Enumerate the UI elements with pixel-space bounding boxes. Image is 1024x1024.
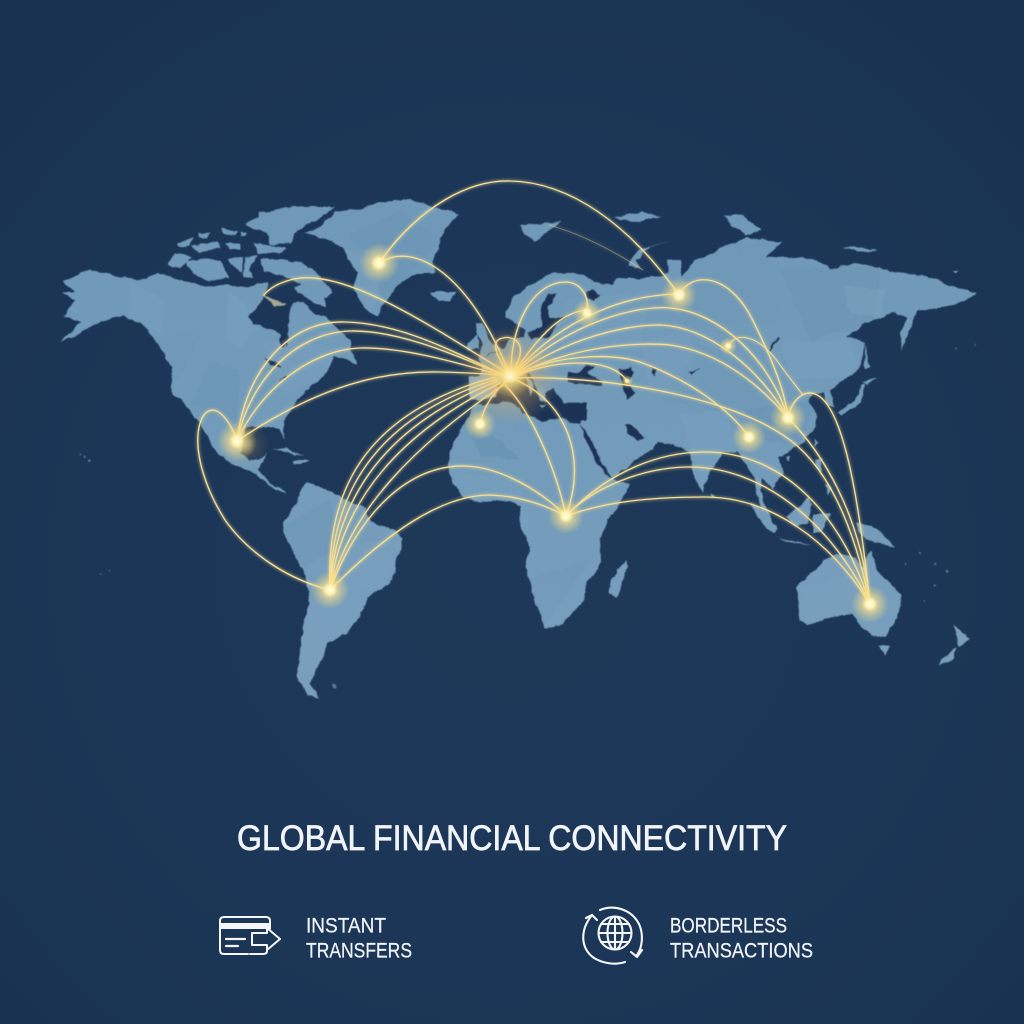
label: instant transfers: INSTANT <box>306 914 386 938</box>
node: Argentina <box>311 571 349 609</box>
glowing city nodes <box>217 243 889 623</box>
arcs: Argentina to Europe <box>330 377 503 590</box>
connection arcs <box>198 181 870 604</box>
feature: instant transfers <box>220 914 412 962</box>
arcs: Argentina to Africa <box>330 466 566 590</box>
arc: Greenland to Europe <box>379 256 510 375</box>
inland seas and water bodies <box>264 290 778 477</box>
arcs: China to Australia <box>788 393 870 604</box>
Italy and Greece peninsulas <box>524 374 546 408</box>
icon: card with arrow <box>220 917 280 954</box>
node: Mexico <box>217 421 257 461</box>
arc: Greenland to Siberia <box>379 181 679 295</box>
land masses <box>40 190 990 710</box>
node: Morocco <box>464 408 496 440</box>
label: borderless transactions: BORDERLESS <box>670 914 787 938</box>
node: China <box>770 400 806 436</box>
remote pacific islands <box>80 344 976 688</box>
label: borderless transactions: TRANSACTIONS <box>670 938 813 962</box>
node: Greenland <box>359 243 399 283</box>
node: Central Asia <box>719 337 737 355</box>
node: Siberia <box>661 277 697 313</box>
arcs: Europe to Africa <box>505 378 574 516</box>
node: Caspian <box>621 375 633 387</box>
world map <box>40 190 990 710</box>
node: Australia <box>851 585 889 623</box>
node: warm glow over Gulf of Mexico <box>222 421 270 469</box>
arc: Siberia to China <box>679 280 788 418</box>
arcs: Mexico to Europe <box>237 322 510 441</box>
arc: Central Asia to China <box>728 337 803 395</box>
node: South Asia <box>732 420 766 454</box>
label: instant transfers: TRANSFERS <box>306 938 412 962</box>
arcs: Europe to Asia <box>496 282 788 437</box>
low-poly land facets <box>128 210 885 680</box>
node: Europe hub <box>460 326 560 426</box>
arc: Europe to Australia <box>510 378 870 604</box>
arc: Mexico to Argentina <box>198 410 330 590</box>
arcs: Africa to Australia <box>566 452 870 604</box>
lit patch in Hudson Bay <box>263 295 286 306</box>
node: Eastern Europe <box>573 299 601 327</box>
feature: borderless transactions <box>583 908 813 964</box>
node: Central Africa <box>548 498 584 534</box>
arc: Canada to Europe <box>264 278 510 375</box>
arc: Morocco to Europe <box>480 378 510 424</box>
icon: globe with rotating arrows <box>583 908 642 964</box>
faint arc: Svalbard to Russia <box>549 225 643 270</box>
title: GLOBAL FINANCIAL CONNECTIVITY <box>237 819 787 858</box>
